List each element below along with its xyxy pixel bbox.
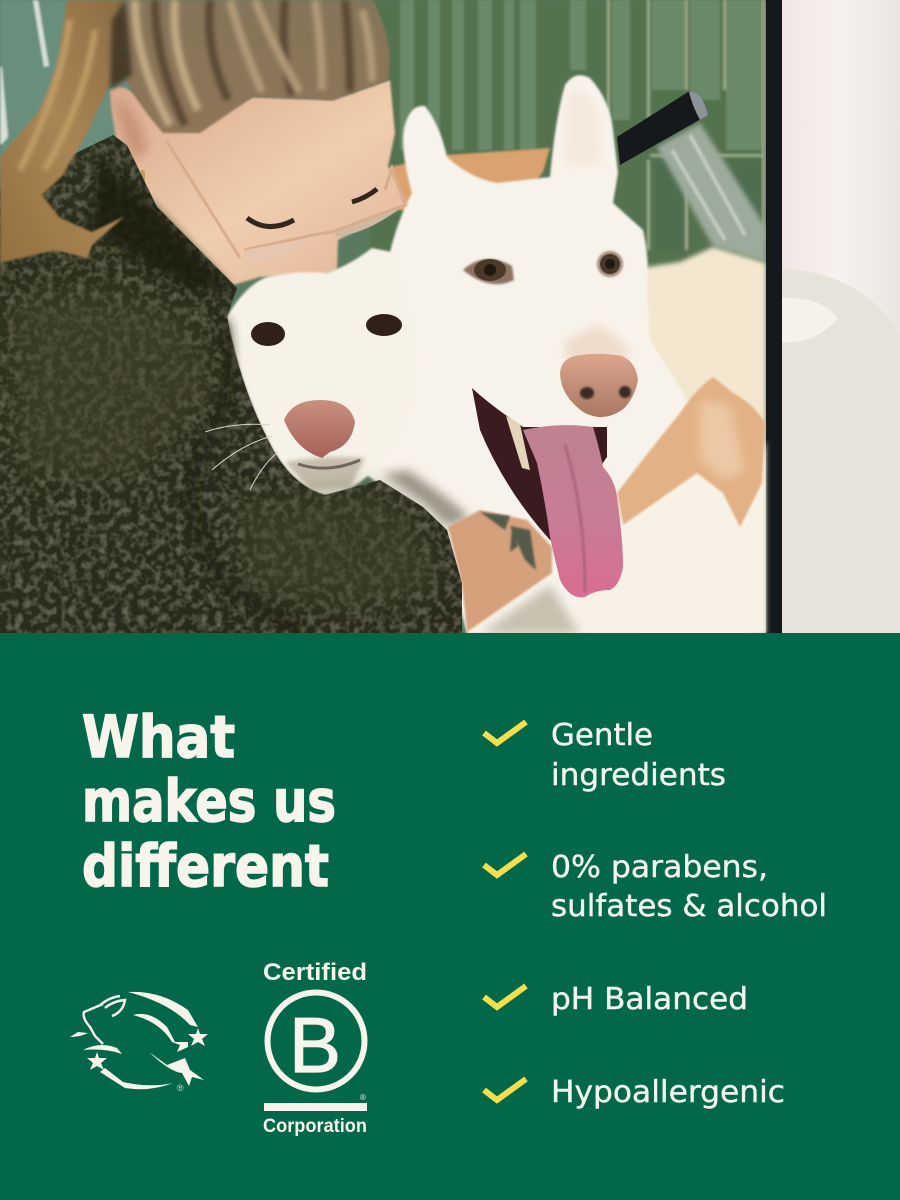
list item: pH balanced: pH Balanced [551, 982, 748, 1017]
woman's face and neck [110, 80, 408, 285]
glasses [166, 140, 405, 262]
ear shading [115, 100, 148, 160]
olive fleece sweater [0, 135, 462, 634]
teeth [506, 416, 530, 470]
fluffy towel [640, 247, 766, 634]
mouth [298, 460, 360, 468]
grey neck shade [383, 470, 470, 527]
black glass frame [766, 0, 782, 634]
shower curtain and tub behind glass [782, 0, 900, 634]
eyes [463, 251, 623, 284]
forearm and hand hugging [617, 377, 765, 527]
woman's slicked-back hair [122, 0, 390, 133]
icon: Certified B Corporation logo: ® [360, 1093, 366, 1102]
list item: gentle ingredients: Gentle [551, 718, 653, 753]
panel: green brand section [0, 633, 900, 1200]
earring [140, 170, 145, 188]
tongue [523, 425, 623, 597]
hand resting behind the dog's head [385, 148, 550, 215]
list item: 0% parabens, sulfates and alcohol: sulfates & alcohol [551, 889, 827, 924]
muzzle shade [285, 457, 365, 490]
heading [82, 703, 336, 900]
eyes [251, 322, 285, 346]
big white dog [360, 75, 766, 634]
icon: Certified B Corporation logo [263, 959, 367, 1137]
list item: 0% parabens, sulfates and alcohol: 0% parabens, [551, 850, 768, 885]
heading: different [82, 832, 329, 900]
nose [560, 354, 638, 417]
list item: gentle ingredients [484, 718, 726, 793]
list item: gentle ingredients: ingredients [551, 758, 726, 793]
list item: 0% parabens, sulfates and alcohol [484, 850, 827, 924]
sweater light and fold shading [10, 160, 440, 630]
lower fur shade under arm [480, 585, 580, 634]
upper arm with tattoo [448, 510, 552, 632]
icon: Certified B Corporation logo: B [289, 1001, 341, 1089]
tiled green shower wall [0, 0, 766, 270]
whiskers over sweater [205, 424, 278, 490]
woman's ponytail [0, 0, 132, 263]
icon: Certified B Corporation logo: Corporation [263, 1116, 367, 1137]
heading: makes us [82, 767, 336, 835]
small white dog [227, 248, 416, 495]
icon: Leaping Bunny cruelty-free logo [70, 992, 208, 1093]
icon: Leaping Bunny cruelty-free logo: ® [177, 1083, 184, 1093]
heading: What [82, 703, 235, 771]
nose [284, 400, 355, 458]
closed eye lashes [247, 189, 377, 227]
mouth [472, 388, 607, 545]
panel: photo of woman hugging two white dogs [0, 0, 900, 634]
ear inner tint [565, 90, 600, 165]
snout tint [565, 325, 630, 360]
lower chest fur to frame [560, 440, 766, 634]
shower head and water [617, 92, 766, 262]
list item: hypoallergenic: Hypoallergenic [551, 1075, 785, 1110]
icon: Certified B Corporation logo: Certified [263, 959, 367, 986]
